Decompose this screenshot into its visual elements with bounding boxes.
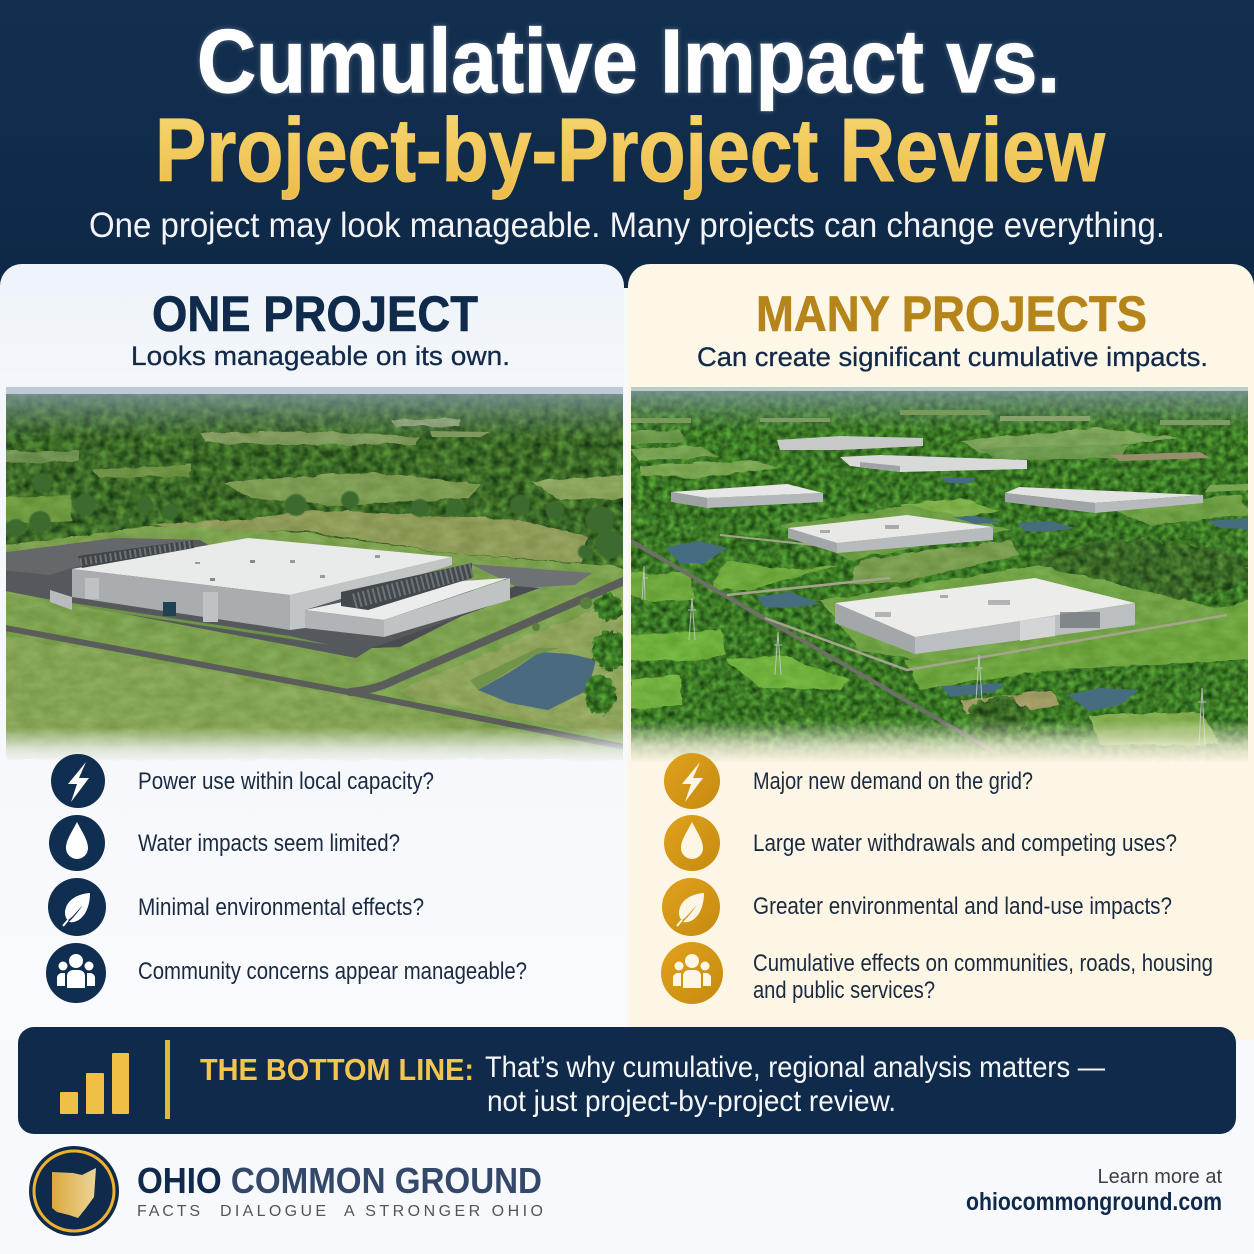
tagline	[137, 1203, 543, 1220]
heading: one project: ONE PROJECT	[152, 286, 478, 342]
callout: the bottom line	[18, 1027, 1236, 1134]
subheading: many projects: Can create significant cumulative impacts.	[697, 342, 1208, 372]
item: power	[51, 754, 434, 808]
field mosaic	[630, 410, 1250, 745]
tagline: A STRONGER OHIO	[344, 1203, 543, 1220]
item: communities	[661, 942, 1213, 1004]
item: environment	[48, 878, 424, 936]
title	[155, 12, 1106, 201]
building: main hall	[50, 538, 452, 630]
subheading: one project: Looks manageable on its own.	[131, 341, 510, 371]
icon: rising bars	[60, 1053, 129, 1114]
item: environment: Minimal environmental effects?	[138, 894, 424, 921]
item: land use	[662, 878, 1172, 936]
cooling units	[78, 540, 472, 610]
tagline: DIALOGUE	[220, 1203, 326, 1220]
title: Cumulative Impact vs.	[197, 12, 1060, 112]
list: many projects questions	[661, 753, 1213, 1004]
building: annex	[305, 578, 510, 637]
title: Project-by-Project Review	[155, 101, 1106, 201]
tree clumps	[7, 475, 624, 559]
item: water	[49, 815, 400, 871]
site grounds	[820, 565, 1230, 665]
title: Cumulative Impact vs.	[197, 12, 1060, 112]
pond	[478, 652, 596, 710]
divider bar	[165, 1040, 170, 1119]
roads	[631, 535, 1227, 755]
far data centers	[777, 436, 1027, 472]
site grass	[0, 526, 630, 760]
data center: rear right	[1005, 487, 1203, 513]
panel: one project	[0, 264, 640, 1040]
data center: rear left	[671, 484, 823, 508]
header band	[0, 0, 1254, 288]
item: land use: Greater environmental and land-use impacts?	[753, 893, 1172, 920]
item: community	[46, 943, 527, 1003]
callout text: That’s why cumulative, regional analysis matters —	[485, 1051, 1105, 1084]
right meadow	[398, 596, 623, 738]
item: grid	[664, 753, 1033, 809]
bottom fade	[625, 720, 1254, 763]
footer logo	[29, 1146, 543, 1236]
darker tree belts	[1030, 540, 1250, 600]
footer link	[966, 1166, 1222, 1216]
photo: multiple data centers	[625, 387, 1254, 763]
callout text: not just project-by-project review.	[487, 1085, 896, 1118]
ponds	[665, 478, 1248, 711]
data center: middle	[788, 515, 993, 553]
item: communities: and public services?	[753, 977, 935, 1004]
asphalt lots	[0, 538, 520, 658]
transmission towers	[642, 566, 1206, 745]
right trees	[532, 593, 628, 715]
road	[0, 574, 640, 750]
panel: many projects	[625, 264, 1254, 1040]
item: grid: Major new demand on the grid?	[753, 768, 1033, 795]
subtitle: One project may look manageable. Many projects can change everything.	[89, 206, 1165, 245]
label: the bottom line: THE BOTTOM LINE:	[200, 1052, 474, 1087]
lawn strip beneath road	[6, 636, 606, 746]
footer link: Learn more at	[1097, 1166, 1222, 1188]
bottom fade	[0, 727, 630, 763]
item: water: Water impacts seem limited?	[138, 830, 400, 857]
item: power: Power use within local capacity?	[138, 768, 434, 795]
photo: single data center	[0, 387, 640, 763]
list: one project questions	[46, 754, 527, 1003]
item: water withdrawals	[664, 815, 1177, 871]
logo badge with Ohio outline	[29, 1146, 119, 1236]
data center: front	[835, 578, 1135, 654]
item: community: Community concerns appear manageable?	[138, 958, 527, 985]
heading: many projects: MANY PROJECTS	[756, 286, 1147, 342]
organization name: OHIO COMMON GROUND	[137, 1160, 542, 1201]
item: water withdrawals: Large water withdrawals and competing uses?	[753, 830, 1177, 857]
tagline: FACTS	[137, 1203, 200, 1220]
callout text	[485, 1051, 1105, 1118]
